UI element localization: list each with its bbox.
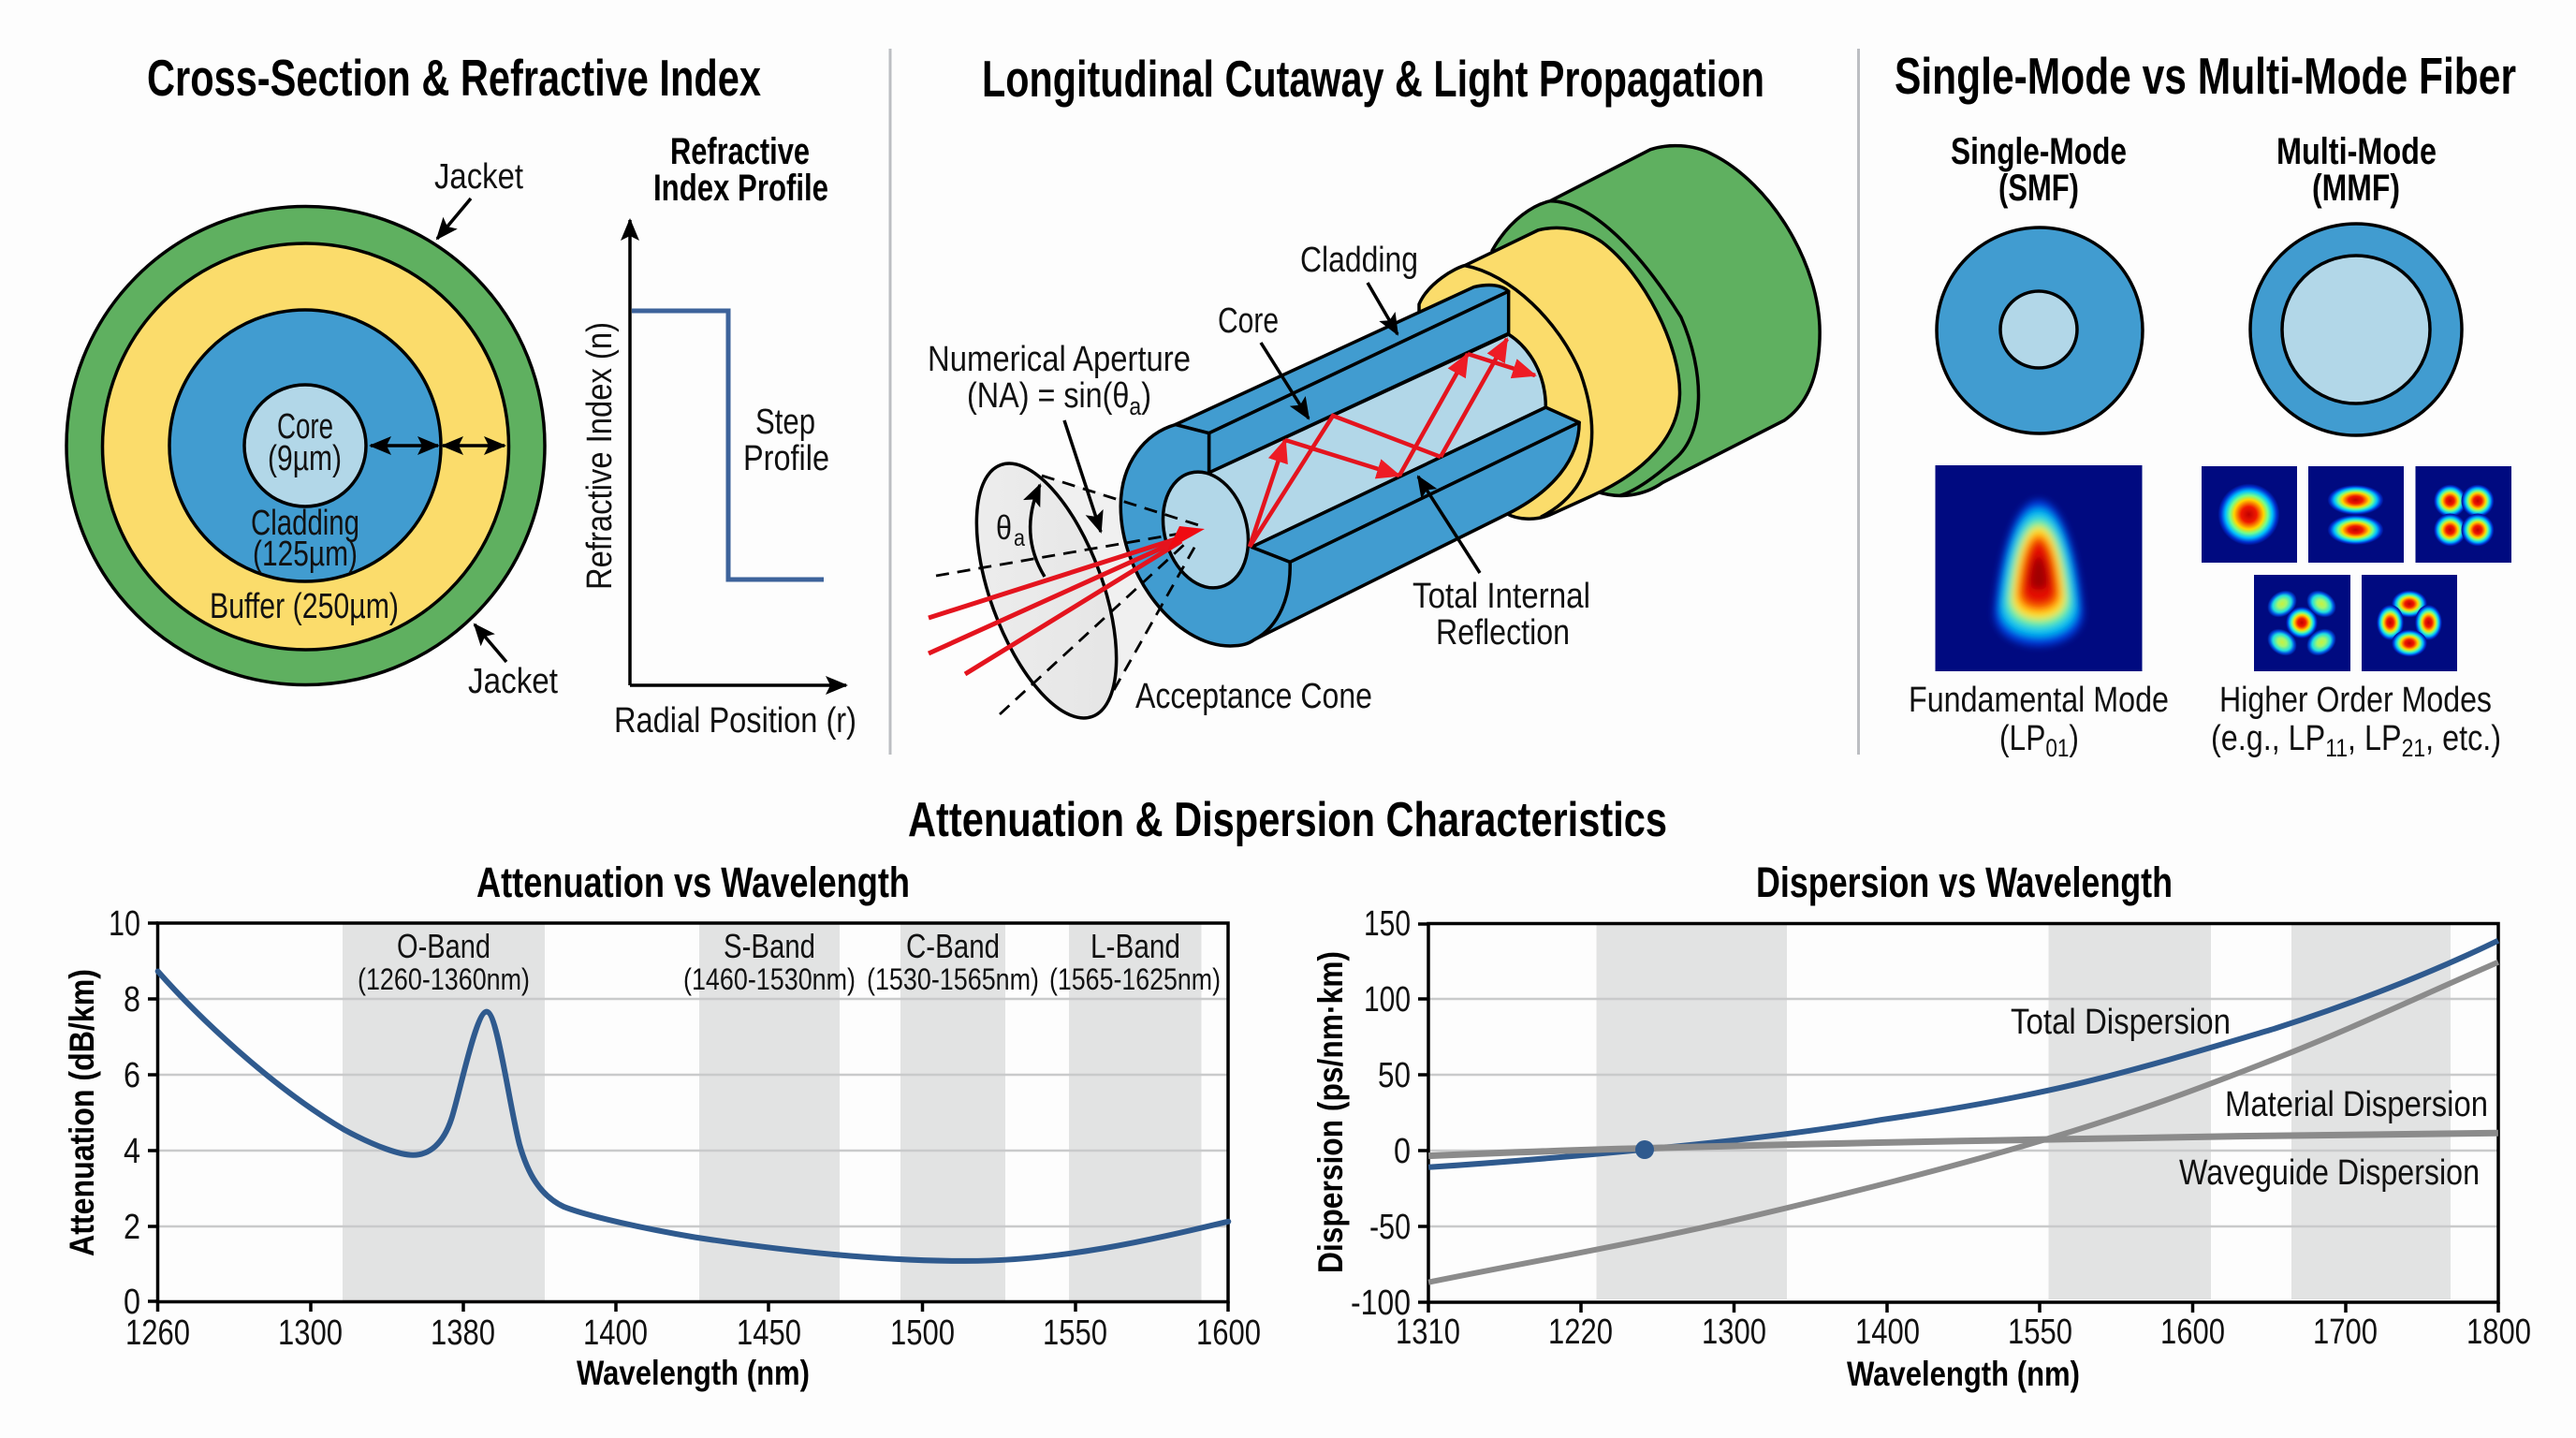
band labels: L-Band: [1090, 927, 1180, 965]
column: multi-mode fiber: , etc.): [2425, 719, 2501, 758]
label: core: [1218, 301, 1309, 418]
curve: total dispersion: [1428, 941, 2498, 1167]
label: total internal reflection: [1412, 477, 1590, 653]
chart: step index profile: Profile: [743, 439, 829, 478]
column: multi-mode fiber: (e.g., LP: [2211, 719, 2346, 758]
diagram: fiber cutaway cylinder: [1120, 146, 1820, 646]
curve labels: Waveguide Dispersion: [2179, 1153, 2480, 1193]
axis title: attenuation: Attenuation (dB/km): [63, 969, 101, 1256]
axis title: wavelength: Wavelength (nm): [1847, 1355, 2080, 1393]
axis labels: dispersion y: -100: [1351, 1284, 1411, 1323]
column: multi-mode fiber: (MMF): [2312, 168, 2400, 209]
label: total internal reflection: Total Internal: [1412, 577, 1590, 616]
curve labels: [2011, 1003, 2488, 1193]
diagram: acceptance cone: [936, 446, 1372, 736]
band labels: (1460-1530nm): [683, 962, 856, 996]
axis labels: dispersion x: 1700: [2313, 1313, 2378, 1352]
heading: longitudinal cutaway: Longitudinal Cutaway & Light Propagation: [982, 50, 1764, 108]
axis labels: attenuation x: 1300: [278, 1313, 343, 1353]
axis labels: attenuation x: 1550: [1043, 1313, 1107, 1353]
diagram: concentric fiber layers: Buffer (250µm): [210, 587, 399, 626]
band labels: S-Band: [724, 927, 815, 965]
axis labels: attenuation x: 1500: [890, 1313, 955, 1353]
axis labels: dispersion y: 50: [1378, 1056, 1411, 1095]
grid lines: [1428, 999, 2498, 1226]
band labels: (1260-1360nm): [358, 962, 530, 996]
axis labels: dispersion x: 1550: [2008, 1313, 2072, 1352]
heatmap: mode 5: [2362, 575, 2457, 671]
axis title: dispersion: Dispersion (ps/nm·km): [1311, 951, 1350, 1273]
label: numerical aperture: Numerical Aperture: [928, 340, 1191, 379]
axis labels: attenuation x: 1450: [737, 1313, 801, 1353]
axis labels: dispersion x: 1300: [1702, 1313, 1766, 1352]
bands: telecom wavelength bands: [343, 924, 1202, 1300]
diagram: concentric fiber layers: Core: [277, 407, 333, 447]
axis labels: attenuation x: 1600: [1196, 1313, 1261, 1353]
band labels: C-Band: [906, 927, 1000, 965]
label: cladding: Cladding: [1300, 241, 1418, 280]
grid lines: [157, 999, 1228, 1226]
column: single-mode fiber: (LP: [1999, 719, 2055, 758]
column: multi-mode fiber: Higher Order Modes: [2219, 681, 2492, 720]
label: jacket top: [434, 157, 523, 239]
axis labels: dispersion x: [1396, 1313, 2531, 1352]
axis labels: dispersion x: 1220: [1548, 1313, 1613, 1352]
curve labels: Total Dispersion: [2011, 1003, 2231, 1042]
diagram: acceptance cone: Acceptance Cone: [1135, 677, 1372, 716]
axis labels: attenuation y: [109, 904, 140, 1322]
axis labels: attenuation y: 10: [109, 904, 140, 944]
column: single-mode fiber: [1909, 131, 2169, 762]
panel: single-mode vs multi-mode: [1895, 47, 2516, 762]
axis labels: dispersion y: [1351, 904, 1411, 1323]
label: numerical aperture: (NA) = sin(θ: [967, 376, 1158, 416]
panel: cross-section and refractive index: [66, 49, 856, 741]
axis labels: dispersion y: 100: [1364, 980, 1411, 1020]
axis labels: attenuation y: 6: [124, 1056, 140, 1095]
band labels: [358, 927, 1221, 996]
heatmap: mode 3: [2415, 466, 2511, 563]
label: cladding: [1300, 241, 1418, 334]
chart title: dispersion: Dispersion vs Wavelength: [1756, 858, 2173, 906]
column: multi-mode fiber: 21: [2402, 734, 2425, 762]
label: jacket bottom: Jacket: [468, 662, 558, 701]
arrows: incoming red light rays: [929, 526, 1205, 674]
band labels: O-Band: [397, 927, 490, 965]
chart title: attenuation: Attenuation vs Wavelength: [476, 858, 910, 906]
axis title: wavelength: Wavelength (nm): [577, 1354, 810, 1392]
heatmap: mode 1: [2202, 466, 2297, 563]
axis labels: attenuation x: 1400: [583, 1313, 648, 1353]
diagram: concentric fiber layers: (9µm): [268, 439, 342, 478]
axis labels: attenuation y: 8: [124, 980, 140, 1020]
chart: step index profile: [580, 220, 856, 741]
label: numerical aperture: [928, 340, 1191, 532]
heading: refractive index profile: [653, 131, 828, 209]
column: multi-mode fiber: [2202, 131, 2511, 762]
column: multi-mode fiber: Multi-Mode: [2276, 131, 2437, 172]
column: multi-mode fiber: 11: [2325, 734, 2348, 762]
axis labels: attenuation y: 2: [124, 1208, 140, 1247]
diagram: acceptance cone: θ: [996, 508, 1012, 547]
column: multi-mode fiber: , LP: [2348, 719, 2402, 758]
label: jacket bottom: [468, 624, 558, 701]
heading: attenuation and dispersion: Attenuation & Dispersion Characteristics: [908, 793, 1667, 847]
chart: step index profile: Radial Position (r): [614, 701, 856, 741]
axis labels: attenuation y: 4: [124, 1132, 140, 1171]
diagram: concentric fiber layers: (125µm): [253, 535, 358, 574]
panel: dispersion chart: [1311, 858, 2531, 1393]
diagram: concentric fiber layers: [66, 206, 545, 685]
heading: refractive index profile: Index Profile: [653, 168, 828, 209]
curve: waveguide dispersion: [1428, 962, 2498, 1283]
band labels: (1565-1625nm): [1049, 962, 1221, 996]
panel: attenuation chart: [63, 858, 1261, 1392]
panel: longitudinal cutaway: [928, 50, 1820, 736]
curve: attenuation: [158, 972, 1228, 1261]
label: total internal reflection: Reflection: [1436, 613, 1570, 653]
label: numerical aperture: a: [1129, 392, 1142, 420]
band labels: (1530-1565nm): [867, 962, 1039, 996]
marker: zero dispersion point: [1635, 1140, 1654, 1159]
axis labels: dispersion x: 1400: [1855, 1313, 1920, 1352]
plot frame and ticks: [1418, 923, 2498, 1313]
column: single-mode fiber: ): [2069, 719, 2079, 758]
axis labels: dispersion y: -50: [1369, 1208, 1411, 1247]
axis labels: attenuation x: 1380: [431, 1313, 495, 1353]
diagram: concentric fiber layers: Cladding: [251, 504, 359, 543]
axis labels: attenuation x: 1260: [125, 1313, 190, 1353]
diagram: core end face: [1150, 462, 1261, 597]
curve: material dispersion: [1428, 1133, 2498, 1156]
column: single-mode fiber: 01: [2045, 734, 2069, 762]
plot frame and ticks: [148, 923, 1228, 1312]
label: core: Core: [1218, 301, 1279, 341]
axis labels: attenuation x: [125, 1313, 1261, 1353]
axis labels: dispersion y: 150: [1364, 904, 1411, 944]
axis labels: dispersion x: 1310: [1396, 1313, 1460, 1352]
label: numerical aperture: ): [1141, 376, 1151, 416]
axis labels: dispersion x: 1600: [2160, 1313, 2225, 1352]
column: single-mode fiber: Single-Mode: [1951, 131, 2127, 172]
column: single-mode fiber: Fundamental Mode: [1909, 681, 2169, 720]
column: single-mode fiber: (SMF): [1998, 168, 2079, 209]
bands: shaded wavelength regions: [1597, 925, 2451, 1299]
curves: dispersion lines: [1428, 941, 2498, 1283]
curve labels: Material Dispersion: [2225, 1085, 2488, 1124]
axis labels: attenuation y: 0: [124, 1283, 140, 1322]
heading: refractive index profile: Refractive: [670, 131, 810, 172]
cone shading behind fiber: [1039, 475, 1161, 690]
heatmap: mode 4: [2254, 575, 2350, 671]
arrows: total internal reflection ray paths: [1250, 339, 1535, 547]
chart: step index profile: Step: [755, 403, 815, 442]
diagram: acceptance cone: a: [1014, 525, 1025, 551]
axis labels: dispersion y: 0: [1394, 1132, 1411, 1171]
heading: cross-section: Cross-Section & Refractive Index: [147, 49, 761, 107]
label: jacket top: Jacket: [434, 157, 523, 197]
heatmap: mode 2: [2308, 466, 2404, 563]
axis labels: dispersion x: 1800: [2466, 1313, 2531, 1352]
chart: step index profile: Refractive Index (n): [580, 322, 620, 590]
